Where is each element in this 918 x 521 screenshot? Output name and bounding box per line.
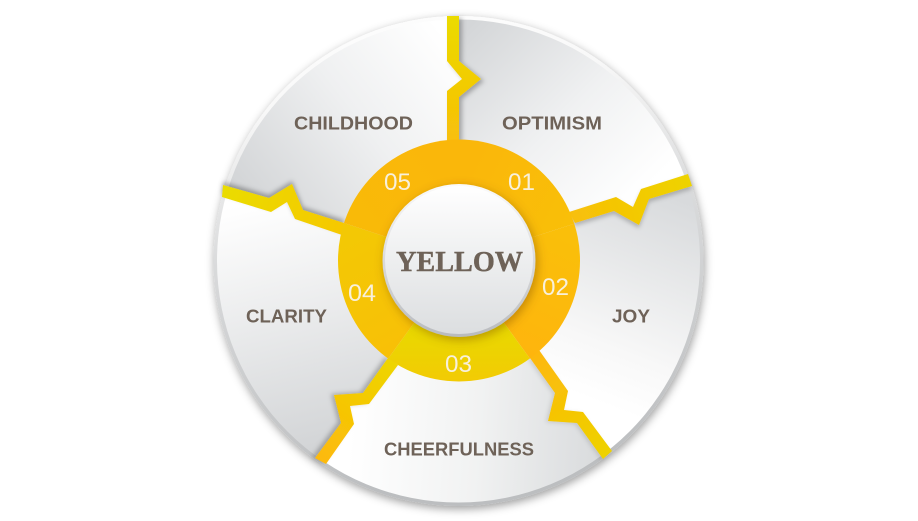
separator: lower left [315,358,398,464]
label: childhood: CHILDHOOD [294,112,413,134]
title: YELLOW [396,246,523,278]
panel: segments [217,20,700,502]
outer disc rim [214,16,704,506]
ring sector 05 [344,140,459,237]
label: cheerfulness: CHEERFULNESS [384,438,534,460]
separator: left [222,184,344,235]
separator: right [569,174,692,225]
number 01: 01 [508,169,535,196]
label: joy: JOY [612,306,651,326]
ring sector 04 [338,223,414,358]
separators [222,16,692,464]
centre hub [382,184,536,337]
infographic: yellow wheel [208,13,710,515]
segment: clarity [217,198,388,456]
number 04: 04 [348,280,376,307]
hub rim [382,184,536,337]
separator: top [447,16,481,145]
segment: joy [540,215,700,449]
hub face [385,186,533,334]
segment: cheerfulness [326,358,600,502]
number 03: 03 [445,351,472,378]
ring sector 03 [388,322,530,382]
segment: childhood [229,48,447,203]
number 02: 02 [542,274,569,301]
label: optimism: OPTIMISM [502,112,602,134]
separator: lower right [530,350,612,459]
ring sector 02 [504,224,580,358]
ring sector 01 [459,140,574,238]
yellow ring [338,140,580,382]
number 05: 05 [384,169,411,196]
segment: optimism [459,20,684,212]
label: clarity: CLARITY [246,306,328,326]
